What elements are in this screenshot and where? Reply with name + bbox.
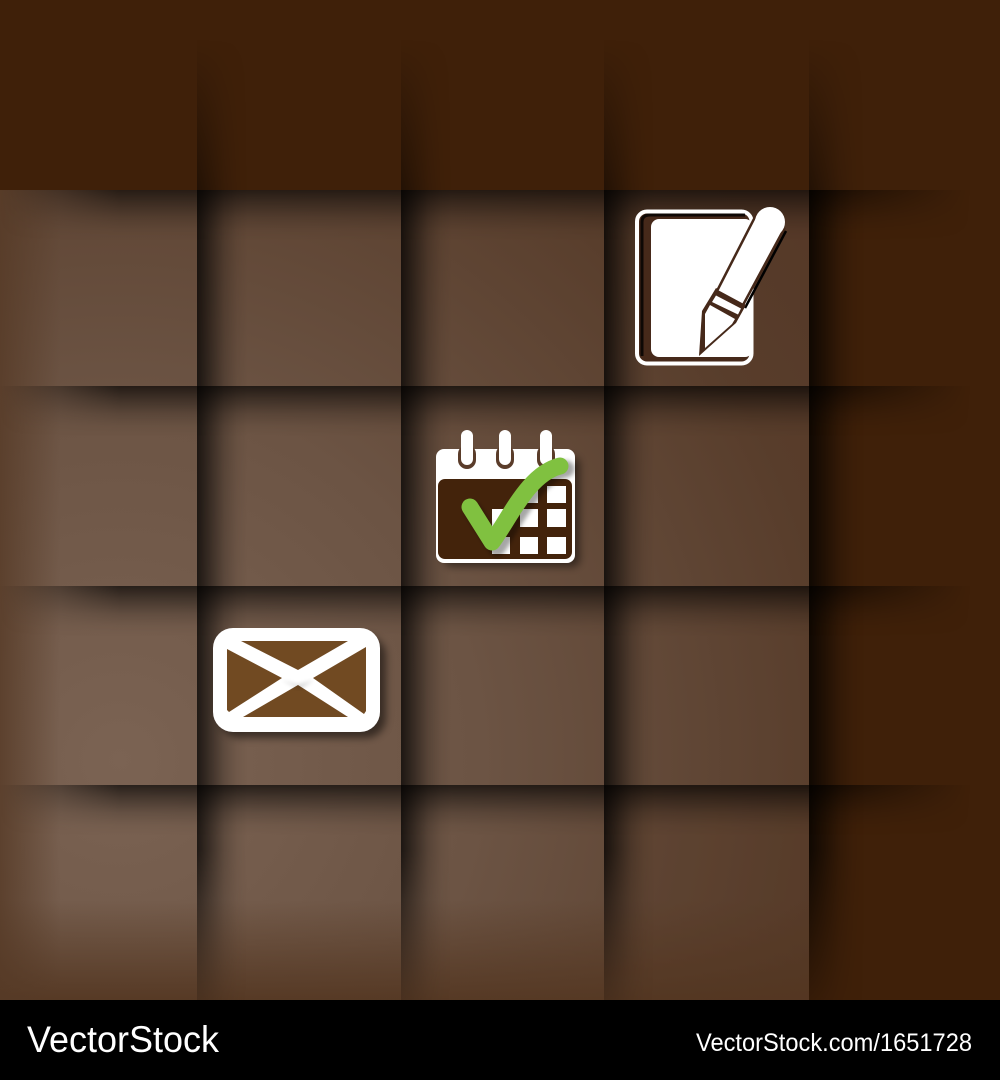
envelope right flap (313, 647, 366, 714)
pencil nib (705, 305, 735, 348)
icon: calendar with check mark (436, 430, 580, 567)
horizontal tile shadows (0, 190, 1000, 835)
pencil band (712, 296, 741, 314)
envelope top flap (241, 641, 348, 670)
pencil nib and band backing (699, 288, 746, 356)
envelope body (213, 628, 380, 732)
vertical tile shadows (197, 190, 864, 1000)
pencil body (717, 207, 785, 305)
calendar shadow (444, 457, 580, 567)
icon: envelope (213, 628, 386, 738)
footer url text: VectorStock.com/1651728 (696, 1029, 972, 1057)
notepad sheet (651, 219, 753, 357)
envelope bottom flap (243, 685, 348, 717)
pencil shadow (745, 231, 786, 308)
notepad outer frame (637, 212, 752, 364)
calendar dark panel (438, 479, 572, 559)
footer bar (0, 1000, 1000, 1080)
footer logo text: VectorStock (27, 1019, 219, 1060)
calendar page (436, 449, 575, 563)
notepad inner shading (642, 215, 745, 356)
envelope shadow (220, 636, 386, 738)
calendar day squares (492, 486, 566, 554)
envelope left flap (227, 649, 282, 712)
background: lighter tile grid (0, 190, 809, 1000)
check mark shadow (473, 469, 566, 548)
check mark (470, 466, 560, 542)
icon: notepad and pencil (637, 207, 786, 364)
calendar rings (458, 430, 555, 469)
envelope fold shadow (281, 680, 314, 689)
top band column shadows (197, 83, 838, 190)
